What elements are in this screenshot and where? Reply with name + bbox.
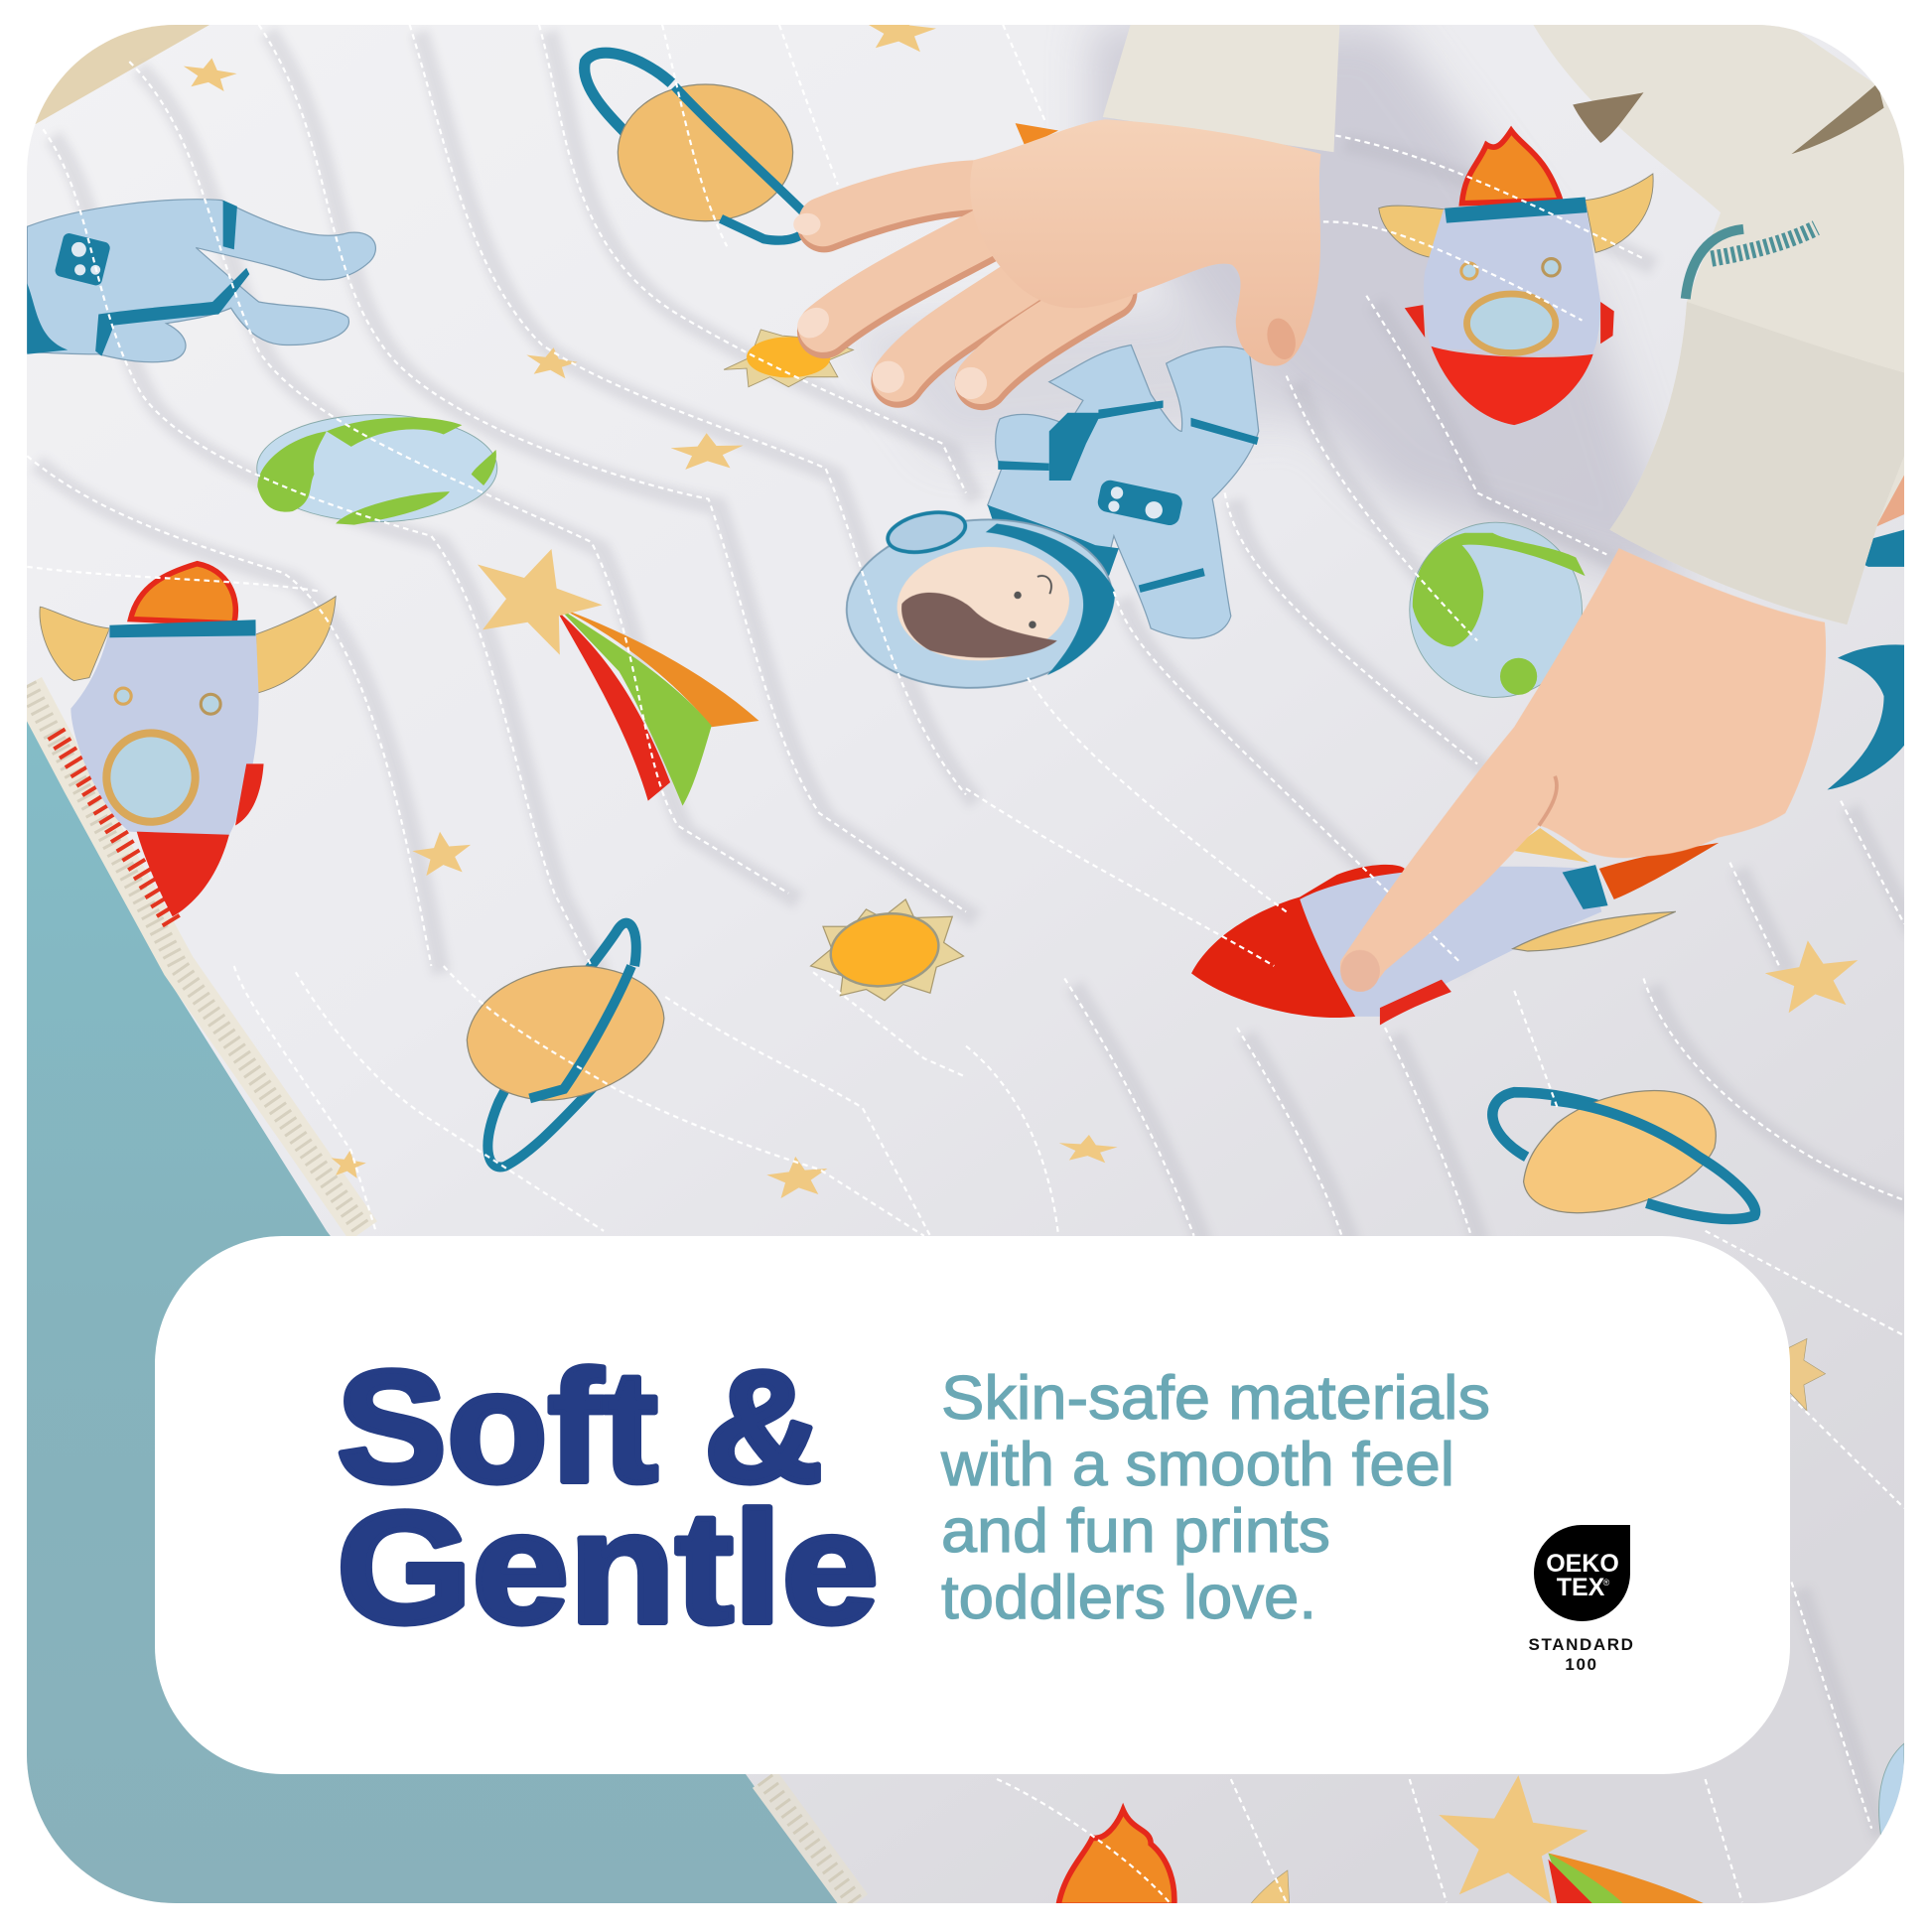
icon: orange tip behind hand (1016, 123, 1058, 147)
quilting shadows: upper left (37, 32, 976, 973)
icon: sun peeking beside card (1788, 1338, 1826, 1411)
badge: OEKO-TEX Standard 100: STANDARD (1529, 1635, 1634, 1654)
icon: sun, lower middle (811, 899, 963, 1001)
icon: astronaut helmet and face (841, 506, 1118, 697)
icon: planet edge bottom right (1879, 1743, 1904, 1835)
icon: shooting star with rainbow tail (478, 549, 759, 806)
badge: OEKO-TEX Standard 100: TEX (1557, 1574, 1605, 1601)
icon: ringed planet, top (585, 53, 808, 240)
heading: Soft & Gentle (337, 1337, 879, 1656)
badge: OEKO-TEX Standard 100: ® (1603, 1578, 1610, 1587)
icon: floating astronaut, upper left (27, 200, 375, 362)
icon: black drop (1534, 1525, 1630, 1621)
prints on mat: upper right quadrant (988, 123, 1904, 789)
hand: left hand, flat on mat (791, 119, 1320, 399)
icon: ringed planet, lower right (1492, 1091, 1755, 1219)
blanket hem (27, 685, 856, 1903)
icon: ringed planet, lower left (467, 923, 664, 1168)
icon: teal rocket fragments, right (1827, 530, 1904, 789)
icon: small stars (181, 7, 937, 877)
heading: Soft & Gentle: Gentle (337, 1478, 879, 1656)
quilting shadows: lower right (1074, 986, 1914, 1836)
description text: and fun prints (941, 1497, 1330, 1566)
prints on mat: upper left quadrant (27, 7, 937, 916)
heading: Soft & Gentle: Soft & (337, 1337, 823, 1515)
icon: flame on lower rocket (1058, 1810, 1174, 1905)
badge: OEKO-TEX Standard 100 (1529, 1525, 1634, 1674)
icon: shooting star, bottom (1431, 1767, 1709, 1907)
description text: Skin-safe materials (941, 1364, 1490, 1433)
icon: astronaut suit, centre (988, 345, 1259, 638)
quilting shadows: upper right (1124, 143, 1914, 973)
prints on mat: lower left quadrant (329, 923, 830, 1199)
quilting stitches: upper right (966, 25, 1904, 966)
icon: green-blue planet (1410, 522, 1586, 697)
white text card (155, 1236, 1790, 1774)
prints on mat: lower right quadrant (1058, 934, 1904, 1907)
badge: OEKO-TEX Standard 100: OEKO (1546, 1550, 1619, 1578)
icon: earth globe (257, 415, 497, 525)
teal surface (27, 721, 838, 1903)
sleeve: left child arm cuff (1103, 19, 1340, 152)
icon: gold fin (1249, 1870, 1290, 1905)
forearm patch on far right (1866, 456, 1904, 531)
quilting stitches: lower right (966, 978, 1904, 1902)
description text (940, 1364, 1490, 1632)
wooden corner (27, 25, 209, 129)
icon: sun under fingertip (724, 330, 853, 387)
description text: with a smooth feel (940, 1431, 1454, 1499)
description text: toddlers love. (941, 1564, 1316, 1632)
icon: rocket, left (40, 564, 336, 916)
quilting stitches: lower left (234, 966, 966, 1236)
hand: right hand, pointing finger (1340, 548, 1826, 992)
icon: sleeve print, dinosaur patches (1573, 92, 1644, 143)
badge: OEKO-TEX Standard 100: 100 (1565, 1655, 1598, 1674)
quilting stitches: upper left (27, 25, 966, 966)
icon: stars on lower right (1058, 934, 1863, 1164)
icon: rocket being pointed at (1191, 828, 1719, 1026)
icon: small stars (329, 1148, 830, 1199)
icon: rocket, upper right (1379, 131, 1653, 425)
soft shading on mat (844, 25, 1688, 596)
sleeve: right child arm (1530, 19, 1915, 624)
